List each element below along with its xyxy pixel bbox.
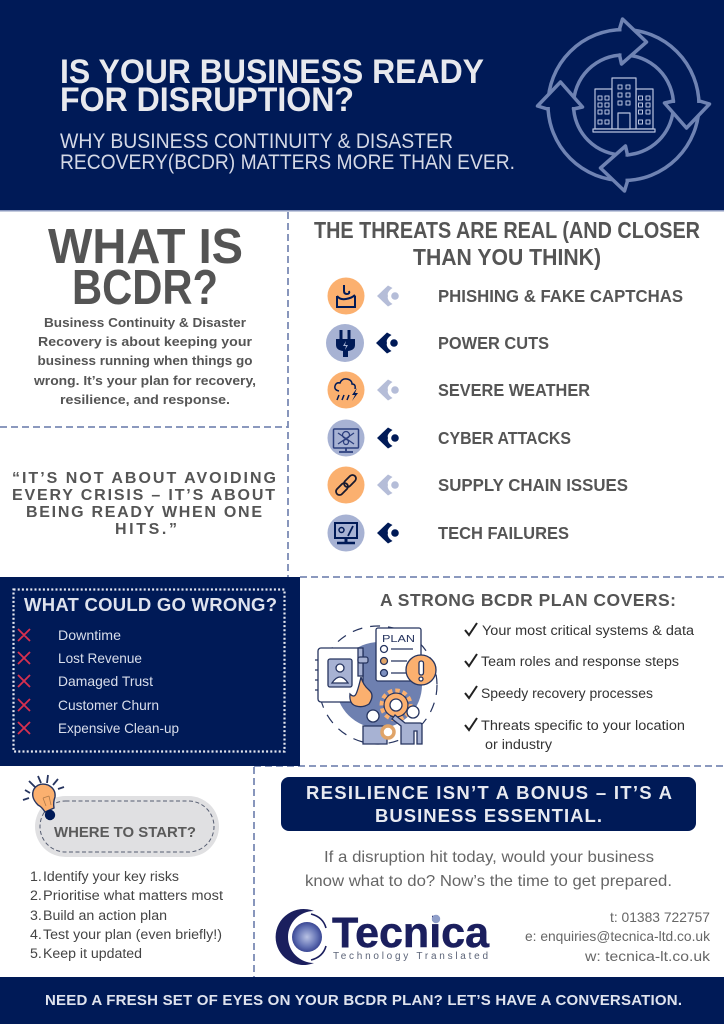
list: steps: 1. (30, 869, 42, 885)
panel: strong BCDR plan (315, 590, 695, 752)
badge: where to start (35, 796, 219, 857)
threat: severe weather: SEVERE WEATHER (438, 380, 590, 400)
text block: prompt: If a disruption hit today, would your business (324, 849, 654, 866)
list: steps: Prioritise what matters most (43, 888, 223, 904)
text block: BCDR definition: wrong. It’s your plan for recovery, (33, 373, 256, 388)
heading: what is BCDR: WHAT IS (48, 220, 243, 274)
list: consequences (58, 627, 179, 736)
text block: contact details (525, 909, 711, 964)
list: plan items (481, 623, 695, 752)
panel: header (0, 0, 724, 212)
text block: contact details: w: tecnica-lt.co.uk (584, 948, 711, 964)
logo: Tecnica: Tecnica (332, 909, 490, 957)
title: FOR DISRUPTION? (60, 81, 354, 119)
heading: plan covers: A STRONG BCDR PLAN COVERS: (380, 590, 676, 610)
list: consequences: Lost Revenue (58, 650, 142, 666)
logo: Tecnica: Technology Translated (333, 951, 488, 962)
icons: red crosses (18, 629, 30, 734)
badge: where to start: WHERE TO START? (54, 824, 196, 841)
subtitle: RECOVERY(BCDR) MATTERS MORE THAN EVER. (60, 151, 515, 174)
text block: prompt (305, 849, 672, 890)
list: steps: 2. (30, 888, 42, 904)
list: steps: 4. (30, 927, 42, 943)
list: consequences: Damaged Trust (58, 673, 153, 689)
threat: phishing: PHISHING & FAKE CAPTCHAS (438, 286, 683, 306)
banner: resilience: RESILIENCE ISN’T A BONUS – IT’S A (306, 782, 672, 803)
heading: what is BCDR: BCDR? (72, 261, 218, 315)
panel: what could go wrong (0, 577, 300, 766)
icon: circular arrows around building (538, 19, 710, 191)
logo: Tecnica (276, 909, 490, 965)
heading: what is BCDR (48, 220, 243, 315)
threat: tech failures (328, 514, 569, 552)
panel: where to start (23, 775, 223, 962)
list: consequences: Expensive Clean-up (58, 720, 179, 736)
panel: threats (314, 217, 700, 552)
footer: call to action: NEED A FRESH SET OF EYES ON YOUR BCDR PLAN? LET’S HAVE A CONVERSATION. (45, 992, 682, 1009)
text block: prompt: know what to do? Now’s the time to get prepared. (305, 873, 672, 890)
text block: BCDR definition: Recovery is about keeping your (38, 334, 252, 349)
panel: what is BCDR (33, 220, 256, 407)
list: plan items: Threats specific to your location (481, 718, 685, 733)
list: plan items: Team roles and response steps (481, 654, 679, 669)
text block: contact details: e: enquiries@tecnica-ltd.co.uk (525, 928, 711, 944)
text block: quote: BEING READY WHEN ONE (26, 504, 262, 521)
text block: BCDR definition (33, 315, 256, 407)
list: steps: Build an action plan (43, 908, 167, 924)
list: steps: Test your plan (even briefly!) (43, 927, 222, 943)
list: steps: 3. (30, 908, 42, 924)
threat: power cuts (326, 324, 549, 362)
text block: contact details: t: 01383 722757 (610, 909, 710, 925)
threat: supply chain (328, 466, 628, 504)
text block: quote: EVERY CRISIS – IT’S ABOUT (12, 487, 275, 504)
list: plan items: Your most critical systems & data (482, 623, 695, 638)
illustration: plan: PLAN (382, 633, 415, 645)
title (60, 53, 484, 119)
text block: BCDR definition: Business Continuity & Disaster (44, 315, 246, 330)
text block: quote: “IT’S NOT ABOUT AVOIDING (12, 470, 276, 487)
heading: what could go wrong: WHAT COULD GO WRONG? (24, 594, 277, 615)
text block: BCDR definition: resilience, and response. (60, 392, 230, 407)
list: steps (30, 869, 223, 962)
threat: cyber attacks: CYBER ATTACKS (438, 428, 571, 448)
threat: tech failures: TECH FAILURES (438, 523, 569, 543)
list: steps: Keep it updated (43, 946, 142, 962)
banner: resilience (281, 777, 696, 831)
heading: threats (314, 217, 700, 270)
subtitle (60, 130, 515, 174)
list: steps: Identify your key risks (43, 869, 179, 885)
list: plan items: Speedy recovery processes (481, 686, 653, 701)
subtitle: WHY BUSINESS CONTINUITY & DISASTER (60, 130, 453, 153)
title: IS YOUR BUSINESS READY (60, 53, 484, 91)
text block: quote: HITS.” (115, 521, 177, 538)
icon: light bulb (23, 775, 64, 820)
footer: call to action (0, 977, 724, 1024)
threat: severe weather (328, 372, 590, 408)
threat: phishing (328, 278, 683, 314)
text block: BCDR definition: business running when things go (38, 353, 253, 368)
threat: cyber attacks (328, 420, 571, 456)
illustration: plan (315, 626, 437, 744)
threat: supply chain: SUPPLY CHAIN ISSUES (438, 475, 628, 495)
panel: section dividers (0, 212, 724, 977)
list: consequences: Downtime (58, 627, 121, 643)
list: steps: 5. (30, 946, 42, 962)
heading: threats: THAN YOU THINK) (413, 244, 601, 270)
list: plan items: or industry (485, 737, 552, 752)
banner: resilience: BUSINESS ESSENTIAL. (375, 805, 602, 826)
list: consequences: Customer Churn (58, 697, 159, 713)
icons: check marks (465, 623, 477, 730)
threat: power cuts: POWER CUTS (438, 333, 549, 353)
text block: quote (12, 470, 276, 538)
